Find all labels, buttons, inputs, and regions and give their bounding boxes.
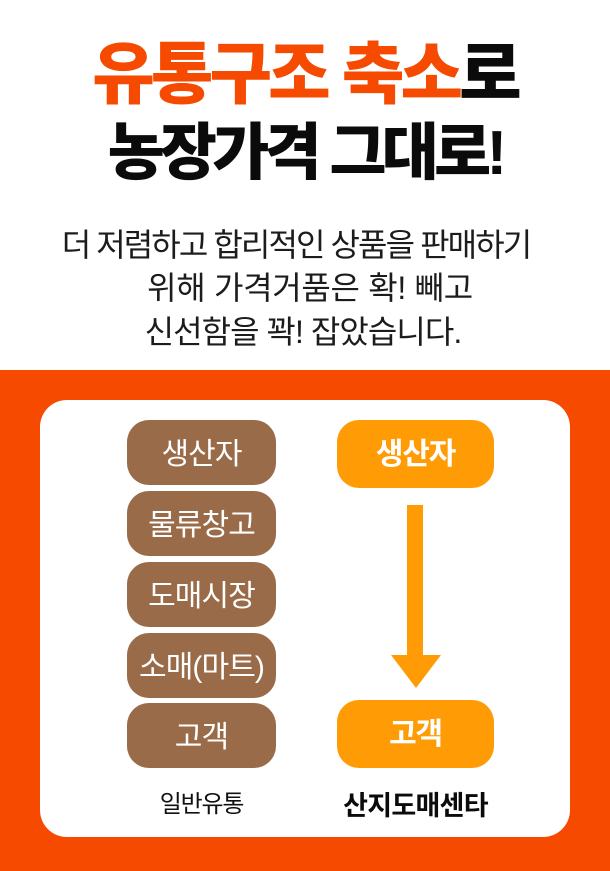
box: customer bbox=[337, 700, 494, 768]
box: customer: 고객 bbox=[175, 721, 228, 754]
intro line 3: 신선함을 꽉! 잡았습니다. bbox=[145, 314, 461, 350]
box: retail mart: 소매(마트) bbox=[139, 651, 264, 684]
column: sanji wholesale center bbox=[337, 420, 494, 821]
box: logistics warehouse bbox=[127, 491, 276, 556]
box: producer: 생산자 bbox=[161, 438, 242, 471]
intro text bbox=[62, 227, 530, 350]
panel: orange background bbox=[0, 370, 610, 871]
box: wholesale market: 도매시장 bbox=[148, 580, 255, 613]
box: logistics warehouse: 물류창고 bbox=[148, 509, 255, 542]
title bbox=[92, 37, 520, 188]
icon: down arrow bbox=[391, 505, 441, 688]
intro line 1: 더 저렴하고 합리적인 상품을 판매하기 bbox=[62, 227, 530, 263]
label: general distribution: 일반유통 bbox=[160, 791, 243, 818]
box: wholesale market bbox=[127, 562, 276, 627]
label: sanji wholesale center: 산지도매센타 bbox=[343, 791, 488, 821]
box: producer bbox=[127, 420, 276, 485]
box: customer bbox=[127, 703, 276, 768]
box: retail mart bbox=[127, 633, 276, 698]
intro line 2: 위해 가격거품은 확! 빼고 bbox=[147, 270, 473, 306]
box: producer bbox=[337, 420, 494, 488]
panel: white comparison card bbox=[40, 400, 570, 837]
title line 1: 유통구조 축소로 bbox=[92, 37, 518, 113]
box: customer: 고객 bbox=[389, 718, 442, 751]
title line 2: 농장가격 그대로! bbox=[108, 119, 502, 188]
column: general distribution bbox=[127, 420, 276, 818]
box: producer: 생산자 bbox=[376, 438, 455, 471]
